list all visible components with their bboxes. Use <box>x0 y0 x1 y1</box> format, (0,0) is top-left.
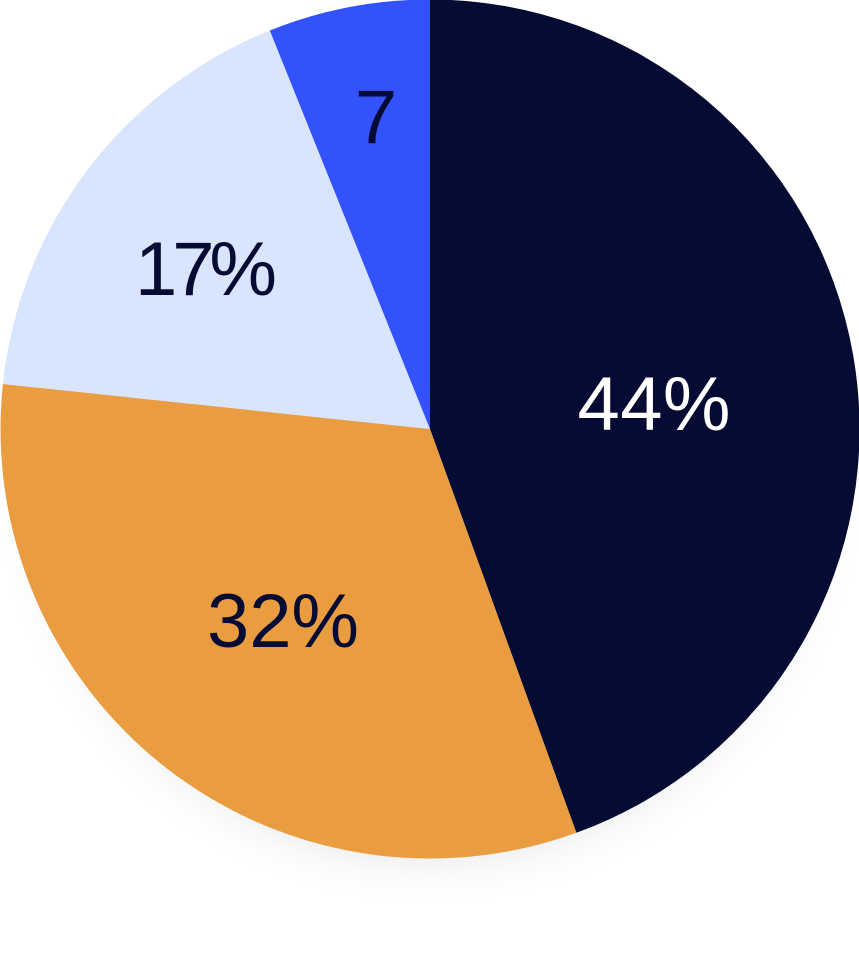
pie shadow <box>45 83 815 853</box>
slice: 17% <box>3 30 430 429</box>
label: 44%: 44% <box>578 362 730 447</box>
label: 32%: 32% <box>207 579 359 664</box>
label: 17%: 17% <box>135 227 277 312</box>
label: 7: 7 <box>355 75 397 160</box>
slice: 7 <box>270 0 430 429</box>
